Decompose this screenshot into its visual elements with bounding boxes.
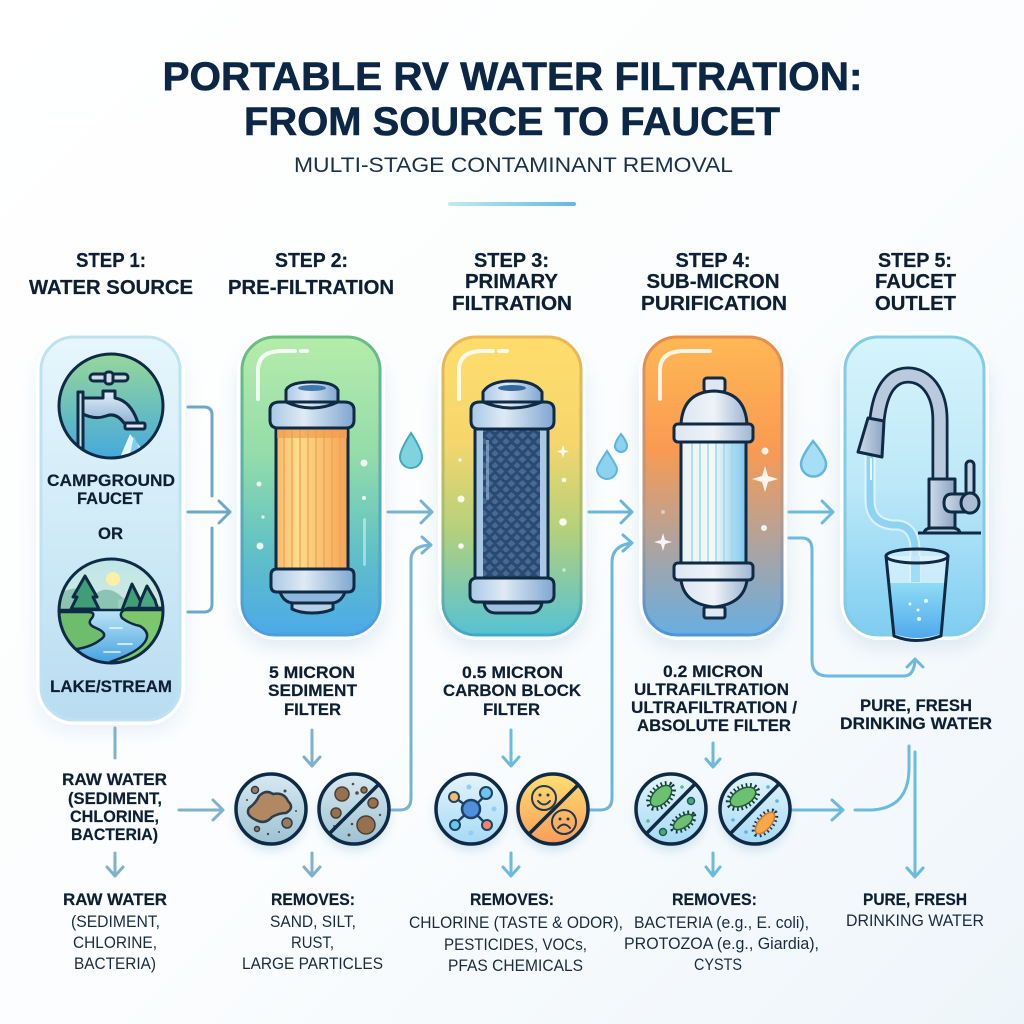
icon: lake and stream [58, 558, 164, 664]
icon: bacteria blocked [636, 774, 706, 844]
heading: step 5: OUTLET [875, 292, 956, 315]
icon: water drop 1 [400, 433, 422, 468]
arrows: step 4 to step 5 [789, 501, 923, 676]
text: pure fresh drinking water: DRINKING WATER [840, 714, 992, 733]
bottom: raw water: BACTERIA) [74, 954, 156, 973]
text: 0.2 micron ultrafiltration [631, 662, 797, 735]
text: raw water contaminants: (SEDIMENT, [68, 789, 162, 808]
highlights [258, 351, 307, 399]
arrows: step 2 to step 3 [388, 501, 432, 810]
text: 5 micron sediment filter: SEDIMENT [268, 681, 358, 700]
icon: protozoa blocked [720, 774, 790, 844]
bottom: step 4 removes: PROTOZOA (e.g., Giardia), [624, 934, 819, 953]
heading: step 2 [228, 249, 394, 299]
text: 5 micron sediment filter: FILTER [284, 700, 341, 719]
icon: kitchen faucet [858, 375, 981, 582]
icon: campground faucet [59, 354, 163, 462]
sparkles [458, 445, 569, 572]
text: 0.2 micron ultrafiltration: ABSOLUTE FILTER [637, 716, 791, 735]
text: 0.5 micron carbon block filter [443, 663, 582, 719]
accent bar [448, 202, 576, 206]
text: pure fresh drinking water: PURE, FRESH [860, 696, 972, 715]
heading: step 2: PRE-FILTRATION [228, 276, 394, 299]
heading: step 4: PURIFICATION [641, 292, 787, 315]
bottom: step 4 removes: REMOVES: [672, 890, 757, 909]
bottom: step 3 removes: PESTICIDES, VOCs, [444, 935, 587, 954]
text: lake/stream: LAKE/STREAM [50, 677, 172, 696]
title: FROM SOURCE TO FAUCET [244, 100, 780, 144]
arrows: step 1 to step 2 [188, 407, 230, 612]
bottom: step 4 removes: BACTERIA (e.g., E. coli), [634, 913, 809, 932]
arrows: downward and connector arrows [107, 728, 923, 877]
text: 5 micron sediment filter [268, 663, 358, 719]
text: or: OR [98, 524, 123, 543]
bottom: pure fresh water [846, 890, 984, 930]
bottom: pure fresh water: PURE, FRESH [863, 890, 967, 909]
text: 0.2 micron ultrafiltration: ULTRAFILTRATION [634, 680, 789, 699]
bottom: raw water: CHLORINE, [73, 933, 157, 952]
text: campground faucet [47, 471, 175, 508]
text: 0.2 micron ultrafiltration: 0.2 MICRON [663, 662, 763, 681]
bottom: pure fresh water: DRINKING WATER [846, 911, 984, 930]
bottom: step 3 removes: PFAS CHEMICALS [448, 956, 583, 975]
bottom: step 3 removes [409, 890, 623, 975]
icon: carbon block cartridge [470, 381, 554, 613]
bottom: step 2 removes [242, 890, 383, 973]
heading: step 3: STEP 3: [474, 249, 549, 272]
text: raw water contaminants: BACTERIA) [71, 825, 158, 844]
panel: carbon filtration [438, 332, 586, 648]
heading: step 5 [875, 249, 956, 315]
text: campground faucet: CAMPGROUND [47, 471, 175, 490]
heading: step 4 [641, 249, 787, 315]
bottom: step 2 removes: LARGE PARTICLES [242, 954, 383, 973]
bottom: step 2 removes: SAND, SILT, [270, 912, 356, 931]
panel: water source [36, 332, 185, 732]
bottom: step 4 removes [624, 890, 819, 974]
heading: step 1 [29, 249, 193, 299]
heading: step 1: STEP 1: [76, 249, 146, 272]
heading: step 4: SUB-MICRON [646, 270, 780, 293]
heading: step 3: FILTRATION [452, 292, 572, 315]
icon: sediment filter cartridge [270, 382, 354, 613]
highlights [459, 351, 507, 399]
heading: step 1: WATER SOURCE [29, 276, 193, 299]
sparkles [654, 448, 778, 551]
bottom: step 2 removes: REMOVES: [271, 890, 355, 909]
bottom: step 3 removes: REMOVES: [470, 890, 554, 909]
text: 0.5 micron carbon block filter: FILTER [483, 700, 540, 719]
bottom: raw water [63, 890, 167, 973]
highlights [660, 351, 710, 399]
icon: taste and odor [518, 774, 588, 844]
text: 5 micron sediment filter: 5 MICRON [269, 663, 355, 682]
title [162, 55, 862, 144]
heading: step 2: STEP 2: [275, 249, 348, 272]
bottom: raw water: (SEDIMENT, [71, 912, 160, 931]
text: 0.5 micron carbon block filter: CARBON BLOCK [443, 681, 582, 700]
panel: faucet outlet [840, 332, 990, 648]
text: 0.5 micron carbon block filter: 0.5 MICRON [462, 663, 563, 682]
bottom: step 3 removes: CHLORINE (TASTE & ODOR), [409, 913, 623, 932]
icon: water drop 3 [801, 441, 826, 476]
heading: step 5: FAUCET [875, 270, 956, 293]
text: pure fresh drinking water [840, 696, 992, 733]
title: PORTABLE RV WATER FILTRATION: [162, 55, 862, 99]
icon: sediment clump [236, 774, 306, 844]
icon: water drops 2 [597, 434, 627, 479]
heading: step 3: PRIMARY [465, 270, 558, 293]
arrows: step 3 to step 4 [589, 501, 632, 810]
panel: pre-filtration [237, 332, 385, 648]
bottom: step 2 removes: RUST, [291, 933, 334, 952]
panel: sub-micron purification [639, 332, 787, 648]
heading: step 4: STEP 4: [676, 249, 750, 272]
icon row: contaminant circles [235, 774, 791, 851]
shadows [235, 779, 791, 851]
bottom: step 4 removes: CYSTS [694, 955, 742, 974]
text: 0.2 micron ultrafiltration: ULTRAFILTRATION / [631, 698, 797, 717]
icon: glass of water [885, 549, 950, 643]
icon: ultrafiltration membrane [674, 378, 753, 618]
subtitle: MULTI-STAGE CONTAMINANT REMOVAL [294, 154, 733, 177]
text: raw water contaminants: RAW WATER [62, 770, 167, 789]
text: raw water contaminants [62, 770, 167, 844]
text: campground faucet: FAUCET [77, 489, 144, 508]
bottom: raw water: RAW WATER [63, 890, 167, 909]
heading: step 5: STEP 5: [878, 249, 952, 272]
text: raw water contaminants: CHLORINE, [70, 807, 159, 826]
step headings [29, 249, 956, 315]
icon: pesticide molecule [436, 774, 506, 844]
icon: particles blocked [319, 774, 389, 844]
sparkles [256, 460, 368, 566]
heading: step 3 [452, 249, 572, 315]
